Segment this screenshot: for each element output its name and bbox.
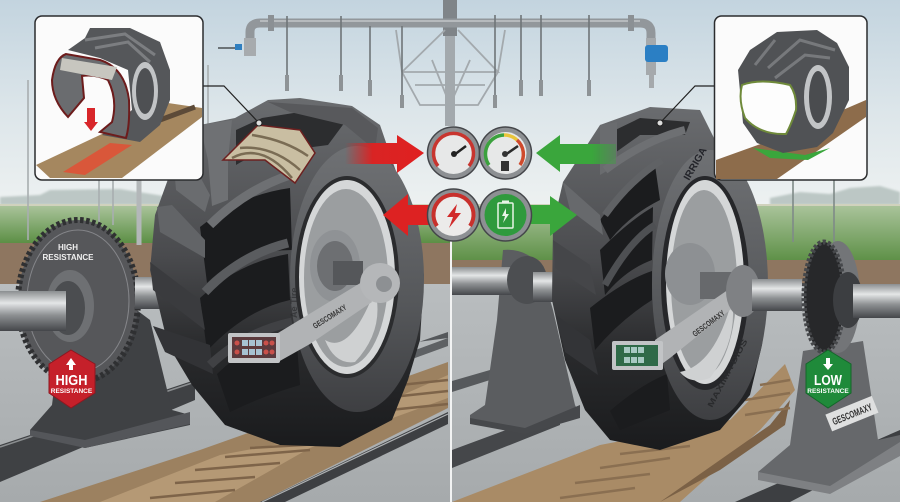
soil rut left	[40, 362, 448, 502]
connector line	[203, 86, 259, 123]
connector line	[660, 86, 714, 123]
gauge: rolling resistance	[428, 127, 480, 179]
torque arm with readout: GESCOMAXY	[311, 303, 349, 331]
inner air chamber	[741, 82, 796, 134]
irrigation pivot structure	[28, 0, 834, 245]
wheel rim	[299, 180, 395, 374]
arrow: red left	[383, 194, 430, 236]
pedestal	[758, 341, 900, 492]
tread lugs	[553, 122, 685, 375]
left test rig	[0, 220, 448, 502]
panel box	[714, 16, 867, 180]
tread pockets	[200, 112, 345, 412]
tyre text: Ae Tire	[289, 288, 299, 318]
tread lugs	[150, 102, 378, 374]
torque arm with readout	[612, 285, 745, 370]
tyre silhouette	[150, 98, 424, 447]
center tower	[443, 0, 457, 126]
sidewall	[652, 150, 768, 420]
flange	[665, 243, 715, 305]
main pipe	[250, 23, 651, 50]
sidewall text: IRRIGA	[682, 146, 710, 182]
arrow: green right	[530, 196, 577, 236]
blue valve	[645, 45, 668, 62]
torque arm with readout	[228, 263, 400, 363]
gear	[804, 241, 900, 353]
torque arm with readout: GESCOMAXY	[691, 308, 727, 339]
shaft right left part	[452, 267, 514, 295]
lower sidewall text: MAXIMA DIUS	[706, 337, 750, 409]
arrow: downward load	[84, 108, 98, 131]
badge: low resistance: LOW	[814, 372, 843, 389]
soil rut right	[452, 364, 795, 502]
soil strip	[716, 100, 866, 179]
sidewall	[290, 146, 424, 412]
gear: high resistance: RESISTANCE	[43, 253, 94, 262]
hub collar	[726, 265, 760, 317]
icon: power loss	[428, 189, 480, 241]
panel box	[35, 16, 203, 180]
right tyre	[552, 107, 768, 450]
badge: low resistance: RESISTANCE	[807, 388, 849, 395]
inset tyre	[738, 30, 849, 153]
gauge: fuel economy	[480, 127, 532, 179]
wheel rim	[666, 180, 744, 384]
right inset: tyre cross-section	[657, 16, 867, 180]
pedestal label	[825, 396, 878, 431]
gear: high resistance	[18, 220, 138, 382]
soil strip	[36, 103, 202, 178]
arrow: green left	[536, 135, 616, 172]
center divider	[450, 190, 452, 502]
tread pockets	[590, 118, 690, 430]
icon: battery saving	[480, 189, 532, 241]
rail tracks left	[0, 380, 195, 482]
hub shaft	[700, 272, 745, 299]
green footprint	[753, 148, 830, 160]
right gear assembly	[752, 241, 900, 494]
right test rig	[452, 250, 900, 502]
badge: high resistance: HIGH	[56, 372, 88, 389]
tread cutaway	[223, 125, 315, 183]
cut section	[52, 54, 129, 138]
shaft left	[0, 291, 66, 331]
floor rails right	[452, 370, 490, 392]
left bearing pedestal	[470, 250, 580, 432]
pedestal label: GESCOMAXY	[831, 402, 874, 428]
output shaft	[752, 279, 802, 311]
sprinkler drops	[287, 15, 589, 105]
left tyre	[150, 98, 424, 447]
wheel flange and hub	[310, 230, 363, 302]
badge: high resistance: RESISTANCE	[51, 388, 93, 395]
badge: high resistance	[49, 350, 95, 408]
background poles	[28, 65, 834, 245]
tyre silhouette	[552, 107, 768, 450]
pedestal	[30, 305, 190, 448]
gear label: HIGH	[58, 243, 78, 252]
truss frame	[396, 30, 505, 105]
badge: low resistance	[806, 350, 851, 408]
left valve	[218, 47, 242, 49]
inset tyre	[52, 28, 170, 142]
left inset: tread cross-section	[35, 16, 262, 180]
arrow: rolling resistance up (red right)	[345, 135, 424, 173]
